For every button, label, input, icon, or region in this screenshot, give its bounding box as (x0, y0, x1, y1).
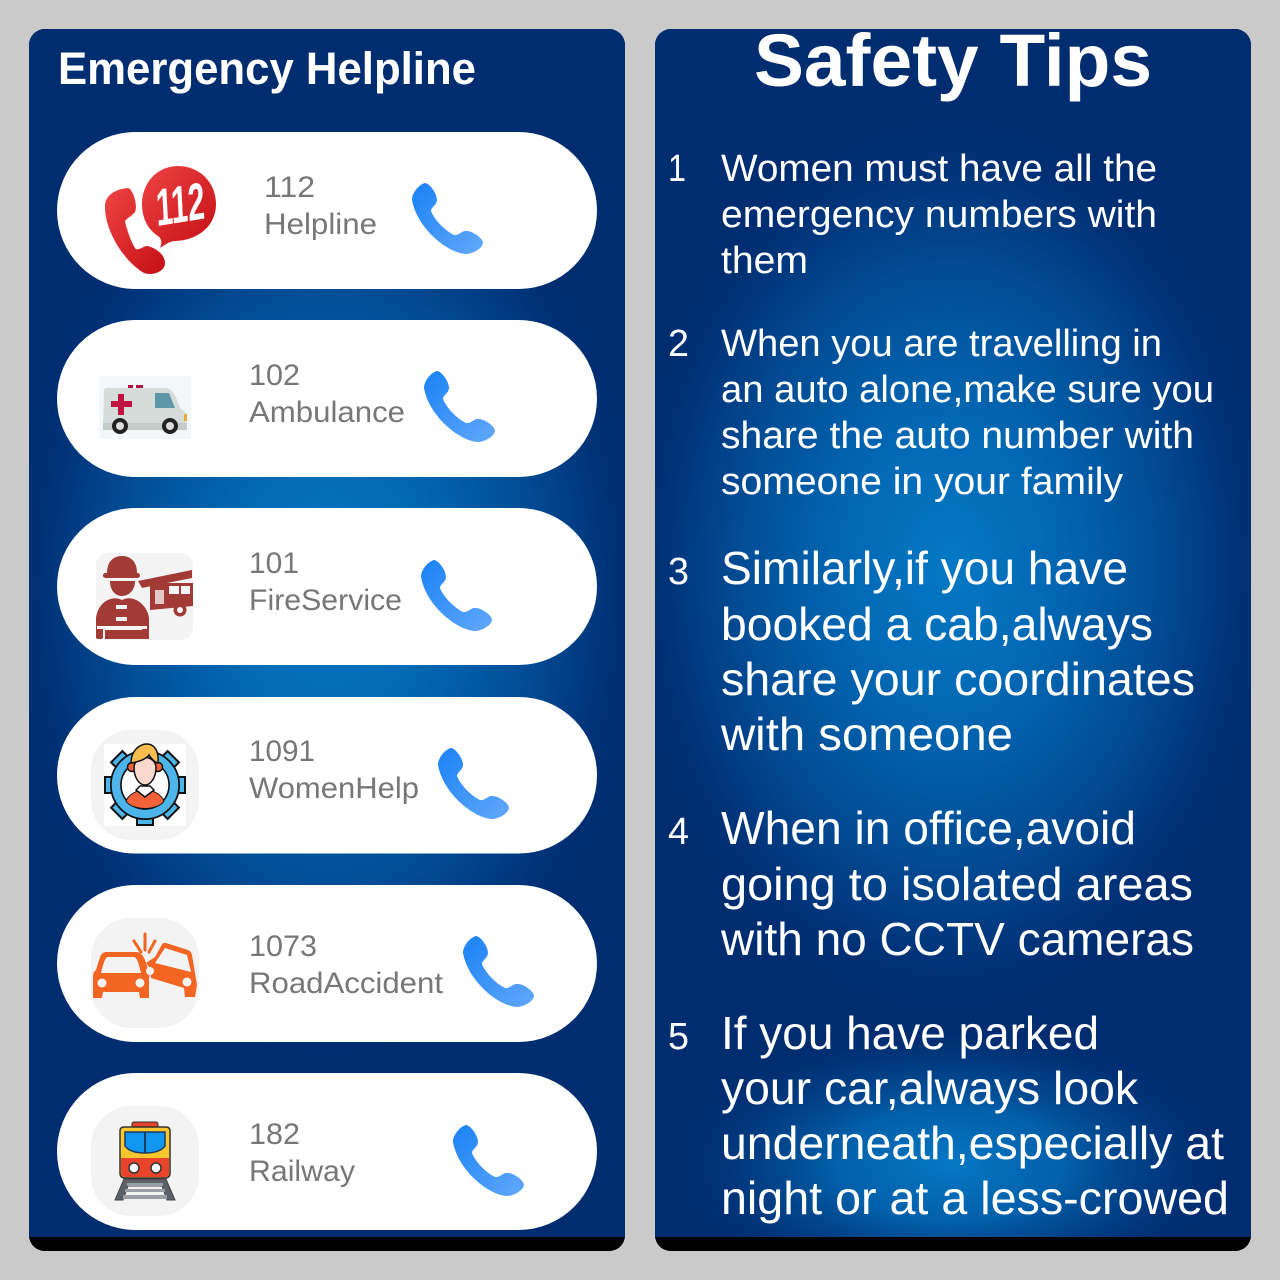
label: 1091 WomenHelp (249, 735, 419, 805)
label: 101 FireService: 101 (249, 547, 299, 580)
tip 2 (668, 323, 1214, 503)
label: 112 Helpline (266, 176, 376, 240)
icon: firefighter and fire truck (96, 553, 193, 640)
label: 182 Railway (251, 1123, 355, 1187)
label: 102 Ambulance (249, 364, 404, 422)
tip 4: going to isolated areas (721, 858, 1193, 910)
icon: call (453, 1125, 524, 1196)
tip 1: Women must have all the (721, 148, 1157, 190)
label: 1091 WomenHelp: WomenHelp (249, 772, 419, 805)
tip 5: your car,always look (721, 1062, 1139, 1114)
tip 4 (668, 810, 1192, 956)
tip 1: 1 (668, 148, 686, 190)
tip 4: with no CCTV cameras (720, 913, 1194, 965)
row: 102 ambulance (57, 320, 597, 477)
heading: safety tips: Safety Tips (754, 19, 1152, 102)
tip 1: emergency numbers with (721, 194, 1157, 236)
icon: train (91, 1106, 199, 1216)
label: 1073 RoadAccident (251, 935, 443, 994)
tip 5: underneath,especially at (721, 1117, 1224, 1169)
panel: emergency helpline (29, 29, 625, 1251)
tip 4: When in office,avoid (721, 802, 1136, 854)
tip 3: with someone (720, 708, 1013, 760)
label: 102 Ambulance: 102 (249, 359, 300, 392)
tip 2: share the auto number with (721, 415, 1194, 457)
label: 101 FireService: FireService (249, 584, 402, 617)
tip 3: booked a cab,always (721, 598, 1153, 650)
tip 5: 5 (668, 1016, 689, 1058)
row: 112 helpline (57, 132, 597, 289)
tip 2: 2 (668, 323, 689, 365)
tip 1: them (721, 240, 808, 282)
tip 3: Similarly,if you have (721, 542, 1128, 594)
icon: ambulance (99, 376, 191, 439)
icon: call (424, 371, 495, 442)
label: 1073 RoadAccident: RoadAccident (249, 967, 444, 1000)
tip 3: 3 (668, 551, 689, 593)
label: 112 Helpline: 112 (264, 171, 315, 204)
label: 101 FireService (251, 552, 401, 610)
tip 1 (670, 154, 1156, 274)
label: 182 Railway: Railway (249, 1155, 355, 1188)
tip 5 (668, 1007, 1229, 1224)
heading: emergency helpline: Emergency Helpline (58, 43, 476, 94)
tip 4: 4 (668, 811, 689, 853)
label: 182 Railway: 182 (249, 1118, 300, 1151)
row: 182 railway (57, 1073, 597, 1230)
tip 2: someone in your family (721, 461, 1123, 503)
tip 3 (668, 542, 1195, 760)
row: 1073 road accident (57, 885, 597, 1042)
tip 2: an auto alone,make sure you (721, 369, 1214, 411)
icon: woman helpline agent in gear (91, 730, 199, 840)
label: 112 Helpline: Helpline (264, 208, 377, 241)
row: 101 fire service (57, 508, 597, 665)
label: 1073 RoadAccident: 1073 (249, 930, 317, 963)
tip 5: If you have parked (721, 1007, 1099, 1059)
row: 1091 women help (57, 697, 597, 854)
tip 3: share your coordinates (721, 653, 1195, 705)
tip 2: When you are travelling in (721, 323, 1162, 365)
icon: call (412, 183, 483, 254)
icon: call (438, 748, 509, 819)
icon: red phone with 112 bubble: 112 (155, 172, 206, 238)
panel: safety tips (655, 19, 1251, 1251)
label: 1091 WomenHelp: 1091 (249, 735, 315, 768)
icon: call (421, 560, 492, 631)
icon: call (463, 936, 534, 1007)
icon: car crash (91, 918, 199, 1028)
tip 5: night or at a less-crowed (721, 1172, 1229, 1224)
label: 102 Ambulance: Ambulance (249, 396, 405, 429)
icon: red phone with 112 bubble (105, 166, 216, 274)
